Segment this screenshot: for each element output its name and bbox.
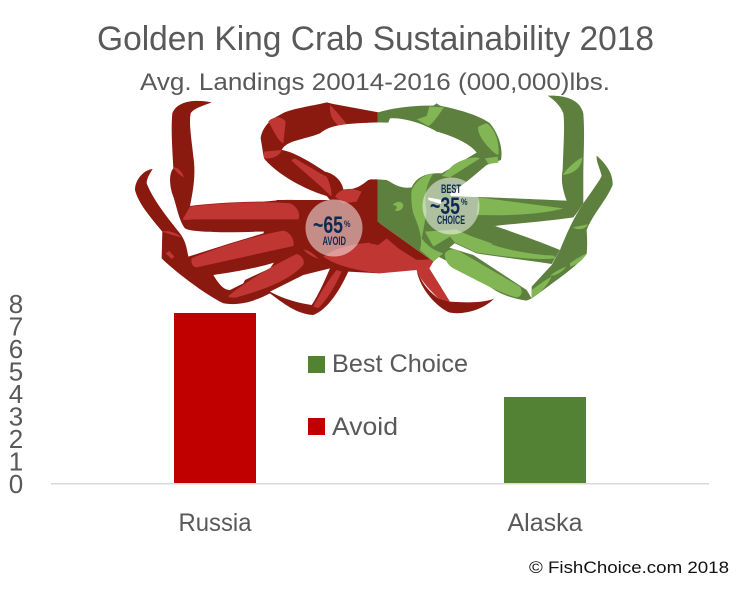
title: Golden King Crab Sustainability 2018	[97, 20, 654, 58]
label: Russia: Russia	[178, 509, 252, 537]
bar: Russia	[174, 313, 256, 483]
y axis labels: 4	[9, 379, 23, 409]
copyright note: © FishChoice.com 2018	[529, 558, 729, 577]
y axis labels: 3	[9, 402, 23, 432]
y axis labels: 5	[9, 356, 23, 386]
callout: 65% avoid: %	[344, 219, 350, 229]
legend: best choice: Best Choice	[332, 350, 468, 378]
legend	[308, 350, 468, 441]
axis line	[51, 483, 709, 484]
y axis labels: 8	[9, 289, 23, 319]
callout: 65% avoid	[306, 200, 362, 256]
body and claw	[377, 103, 502, 262]
y axis labels: 6	[9, 334, 23, 364]
callout: 35% best choice	[422, 178, 480, 234]
callout: 65% avoid: ~65	[313, 212, 343, 239]
outer leg	[532, 156, 613, 298]
bottom leg	[438, 247, 532, 301]
crab right half: best choice	[370, 96, 613, 313]
callout: 65% avoid: AVOID	[322, 234, 346, 248]
y axis labels: 2	[9, 424, 23, 454]
callout: 35% best choice: BEST	[441, 182, 461, 196]
y axis labels: 1	[9, 446, 23, 476]
bar: Alaska	[504, 397, 586, 483]
callout: 35% best choice: %	[461, 197, 468, 207]
crab illustration	[135, 96, 613, 315]
callout: 35% best choice: CHOICE	[437, 213, 465, 227]
y axis labels: 0	[9, 469, 23, 499]
crab red lower wedge	[370, 179, 433, 262]
label: Alaska: Alaska	[508, 509, 583, 537]
y axis labels	[9, 289, 23, 499]
middle leg	[450, 226, 560, 264]
bar chart	[9, 289, 709, 537]
crab left half: avoid	[135, 101, 380, 315]
upper leg	[447, 96, 584, 233]
legend: avoid: Avoid	[332, 413, 398, 441]
light green highlights	[477, 197, 563, 215]
y axis labels: 7	[9, 312, 23, 342]
legend: avoid	[308, 413, 398, 441]
subtitle: Avg. Landings 20014-2016 (000,000)lbs.	[140, 69, 610, 96]
callout: 35% best choice: ~35	[430, 193, 460, 220]
